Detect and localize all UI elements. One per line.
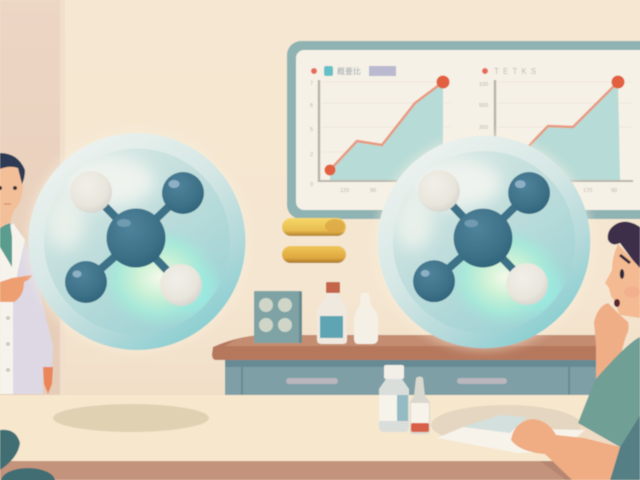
chart: left line chart: 7 xyxy=(310,81,313,87)
shadow on table xyxy=(53,404,209,432)
chart: right line chart xyxy=(479,76,633,194)
chart legend: left xyxy=(311,66,396,76)
student: hair xyxy=(608,222,640,270)
student: mouth xyxy=(614,299,620,307)
bottle with red cap on counter xyxy=(317,282,347,344)
chart legend: left: 概要比 xyxy=(337,66,361,76)
table xyxy=(0,395,590,480)
chart: right line chart: 500 xyxy=(479,103,488,109)
chart: right line chart: 170 xyxy=(583,188,592,194)
molecule left xyxy=(65,171,204,306)
bubble left xyxy=(26,132,246,350)
chart: left line chart: 2 xyxy=(310,152,313,158)
student at right xyxy=(511,222,640,480)
chart: left line chart: 120 xyxy=(340,188,349,194)
student: shirt xyxy=(578,337,640,447)
plant leaves xyxy=(0,430,55,480)
student: eye xyxy=(620,269,624,279)
student: face xyxy=(605,244,640,318)
chart: left line chart: 5 xyxy=(310,127,313,133)
doctor: coat xyxy=(0,223,53,394)
equals sign xyxy=(282,218,346,263)
chart: left line chart: 6 xyxy=(310,103,313,109)
dropper bottle on table xyxy=(410,376,430,434)
doctor: head xyxy=(0,165,23,228)
student: blush xyxy=(624,286,640,298)
chart: right line chart: 100 xyxy=(479,82,488,88)
pill bottle on table xyxy=(379,365,409,432)
chart: left line chart: 0 xyxy=(310,182,313,188)
student: hand on chin xyxy=(594,303,629,382)
chart: left line chart: 90 xyxy=(370,188,376,194)
paper on table xyxy=(437,415,585,453)
whiteboard with charts xyxy=(287,41,640,219)
chart: right line chart: 90 xyxy=(611,188,617,194)
doctor: lower hand xyxy=(43,367,53,394)
chart: right line chart: 300 xyxy=(479,125,488,131)
student: arm xyxy=(511,419,620,480)
white bottle on counter xyxy=(354,293,378,344)
student: eyebrow xyxy=(620,255,630,263)
chart: left line chart xyxy=(310,76,450,194)
student: shirt shade xyxy=(610,415,640,480)
molecule right xyxy=(413,170,550,305)
bubble right xyxy=(369,127,599,357)
doctor at left xyxy=(0,153,53,394)
chart legend: right: T E T K S xyxy=(494,67,537,76)
counter with drawers xyxy=(212,335,600,395)
doctor: shirt xyxy=(0,223,12,267)
doctor: pointing hand xyxy=(0,275,32,302)
doctor: hair xyxy=(0,153,25,184)
medicine box on counter xyxy=(254,291,302,343)
doctor: mouth xyxy=(4,203,11,205)
shadow behind paper xyxy=(431,405,581,445)
doctor: eyes xyxy=(0,186,17,190)
